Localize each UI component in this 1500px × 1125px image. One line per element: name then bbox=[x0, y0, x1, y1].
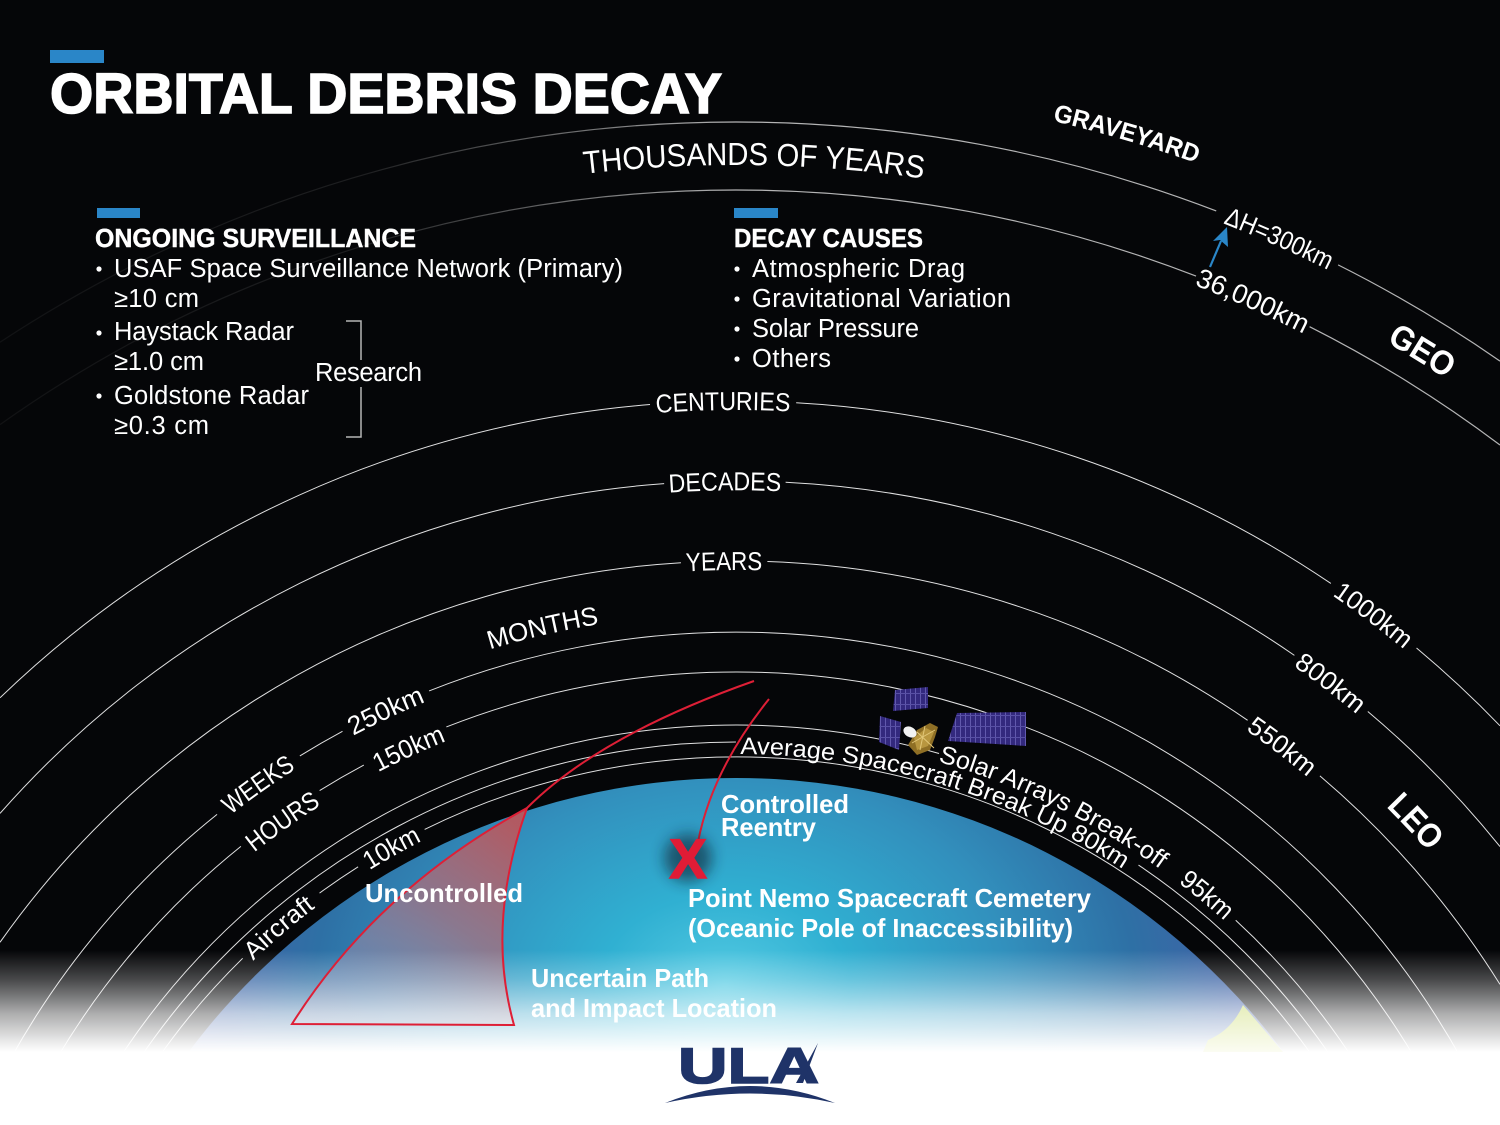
orbit labels: CENTURIES bbox=[656, 392, 790, 413]
orbit labels: Aircraft bbox=[246, 896, 316, 961]
research bracket bbox=[315, 321, 422, 437]
orbit labels: Average Spacecraft Break Up 80km bbox=[740, 738, 1127, 868]
list: surveillance systems: ≥1.0 cm bbox=[114, 348, 204, 376]
bottom white fade bbox=[0, 950, 1500, 1052]
orbit labels: 1000km bbox=[1334, 584, 1410, 648]
earth labels: Uncontrolled bbox=[365, 878, 523, 908]
orbit labels: HOURS bbox=[244, 792, 318, 852]
list: surveillance systems: USAF Space Surveillance Network (Primary) bbox=[114, 255, 623, 283]
research bracket: Research bbox=[315, 359, 422, 387]
list: decay causes: Solar Pressure bbox=[752, 315, 919, 343]
earth labels: Reentry bbox=[721, 812, 817, 842]
earth labels: Point Nemo Spacecraft Cemetery bbox=[688, 883, 1092, 913]
list: surveillance systems bbox=[96, 255, 623, 440]
orbit labels: YEARS bbox=[686, 552, 762, 572]
earth labels: Controlled bbox=[721, 789, 849, 819]
orbit labels: 36,000km bbox=[1196, 270, 1308, 333]
orbit labels: 10km bbox=[364, 830, 420, 870]
title accent bar bbox=[50, 50, 104, 63]
orbit labels: ΔH=300km bbox=[1224, 209, 1332, 270]
earth labels bbox=[365, 789, 1092, 1023]
uncontrolled reentry outline bbox=[292, 681, 754, 1025]
earth labels: (Oceanic Pole of Inaccessibility) bbox=[688, 913, 1073, 943]
orbit labels: GEO bbox=[1391, 326, 1454, 374]
list: surveillance systems: Haystack Radar bbox=[114, 318, 294, 346]
list: decay causes: Atmospheric Drag bbox=[752, 255, 965, 283]
list: decay causes: Gravitational Variation bbox=[752, 285, 1011, 313]
orbit labels: THOUSANDS OF YEARS bbox=[582, 142, 924, 178]
orbit labels: LEO bbox=[1388, 792, 1442, 847]
accent bar: surveillance bbox=[97, 208, 140, 218]
bottom white band bbox=[0, 1052, 1500, 1125]
orbit labels: 550km bbox=[1248, 716, 1314, 776]
list: decay causes: Others bbox=[752, 345, 831, 373]
orbit labels: 800km bbox=[1296, 654, 1363, 714]
heading: ongoing surveillance: ONGOING SURVEILLANCE bbox=[95, 225, 416, 253]
panel: ongoing surveillance bbox=[95, 208, 623, 440]
earth labels: and Impact Location bbox=[531, 993, 777, 1023]
impact X marker: X bbox=[669, 827, 707, 890]
controlled reentry trajectory bbox=[698, 699, 769, 842]
orbit labels: MONTHS bbox=[487, 607, 598, 649]
pale land triangle bbox=[1203, 1005, 1283, 1052]
arrow: delta H bbox=[1210, 227, 1228, 267]
icon: satellite bbox=[879, 687, 1026, 755]
list: surveillance systems: ≥0.3 cm bbox=[114, 412, 209, 440]
accent bar: decay causes bbox=[734, 208, 778, 218]
orbit labels: Solar Arrays Break-off bbox=[940, 746, 1170, 868]
list: surveillance systems: ≥10 cm bbox=[114, 285, 199, 313]
heading: decay causes: DECAY CAUSES bbox=[734, 225, 923, 253]
orbit labels: GRAVEYARD bbox=[1055, 106, 1199, 161]
orbit labels: 150km bbox=[374, 730, 445, 772]
list: decay causes bbox=[734, 255, 1011, 373]
orbit labels: 250km bbox=[348, 690, 424, 736]
list: surveillance systems: Goldstone Radar bbox=[114, 382, 310, 410]
orbit labels bbox=[220, 106, 1454, 961]
panel: decay causes bbox=[734, 208, 1011, 373]
orbit labels: 95km bbox=[1181, 871, 1232, 920]
orbit labels: WEEKS bbox=[220, 756, 294, 812]
uncertain impact area fill bbox=[292, 808, 527, 1025]
earth labels: Uncertain Path bbox=[531, 963, 709, 993]
earth bbox=[183, 778, 1289, 1060]
logo: ULA: ULA bbox=[678, 1038, 819, 1094]
logo: ULA bbox=[665, 1038, 835, 1103]
title: ORBITAL DEBRIS DECAY bbox=[50, 62, 722, 126]
orbit labels: DECADES bbox=[670, 472, 780, 492]
